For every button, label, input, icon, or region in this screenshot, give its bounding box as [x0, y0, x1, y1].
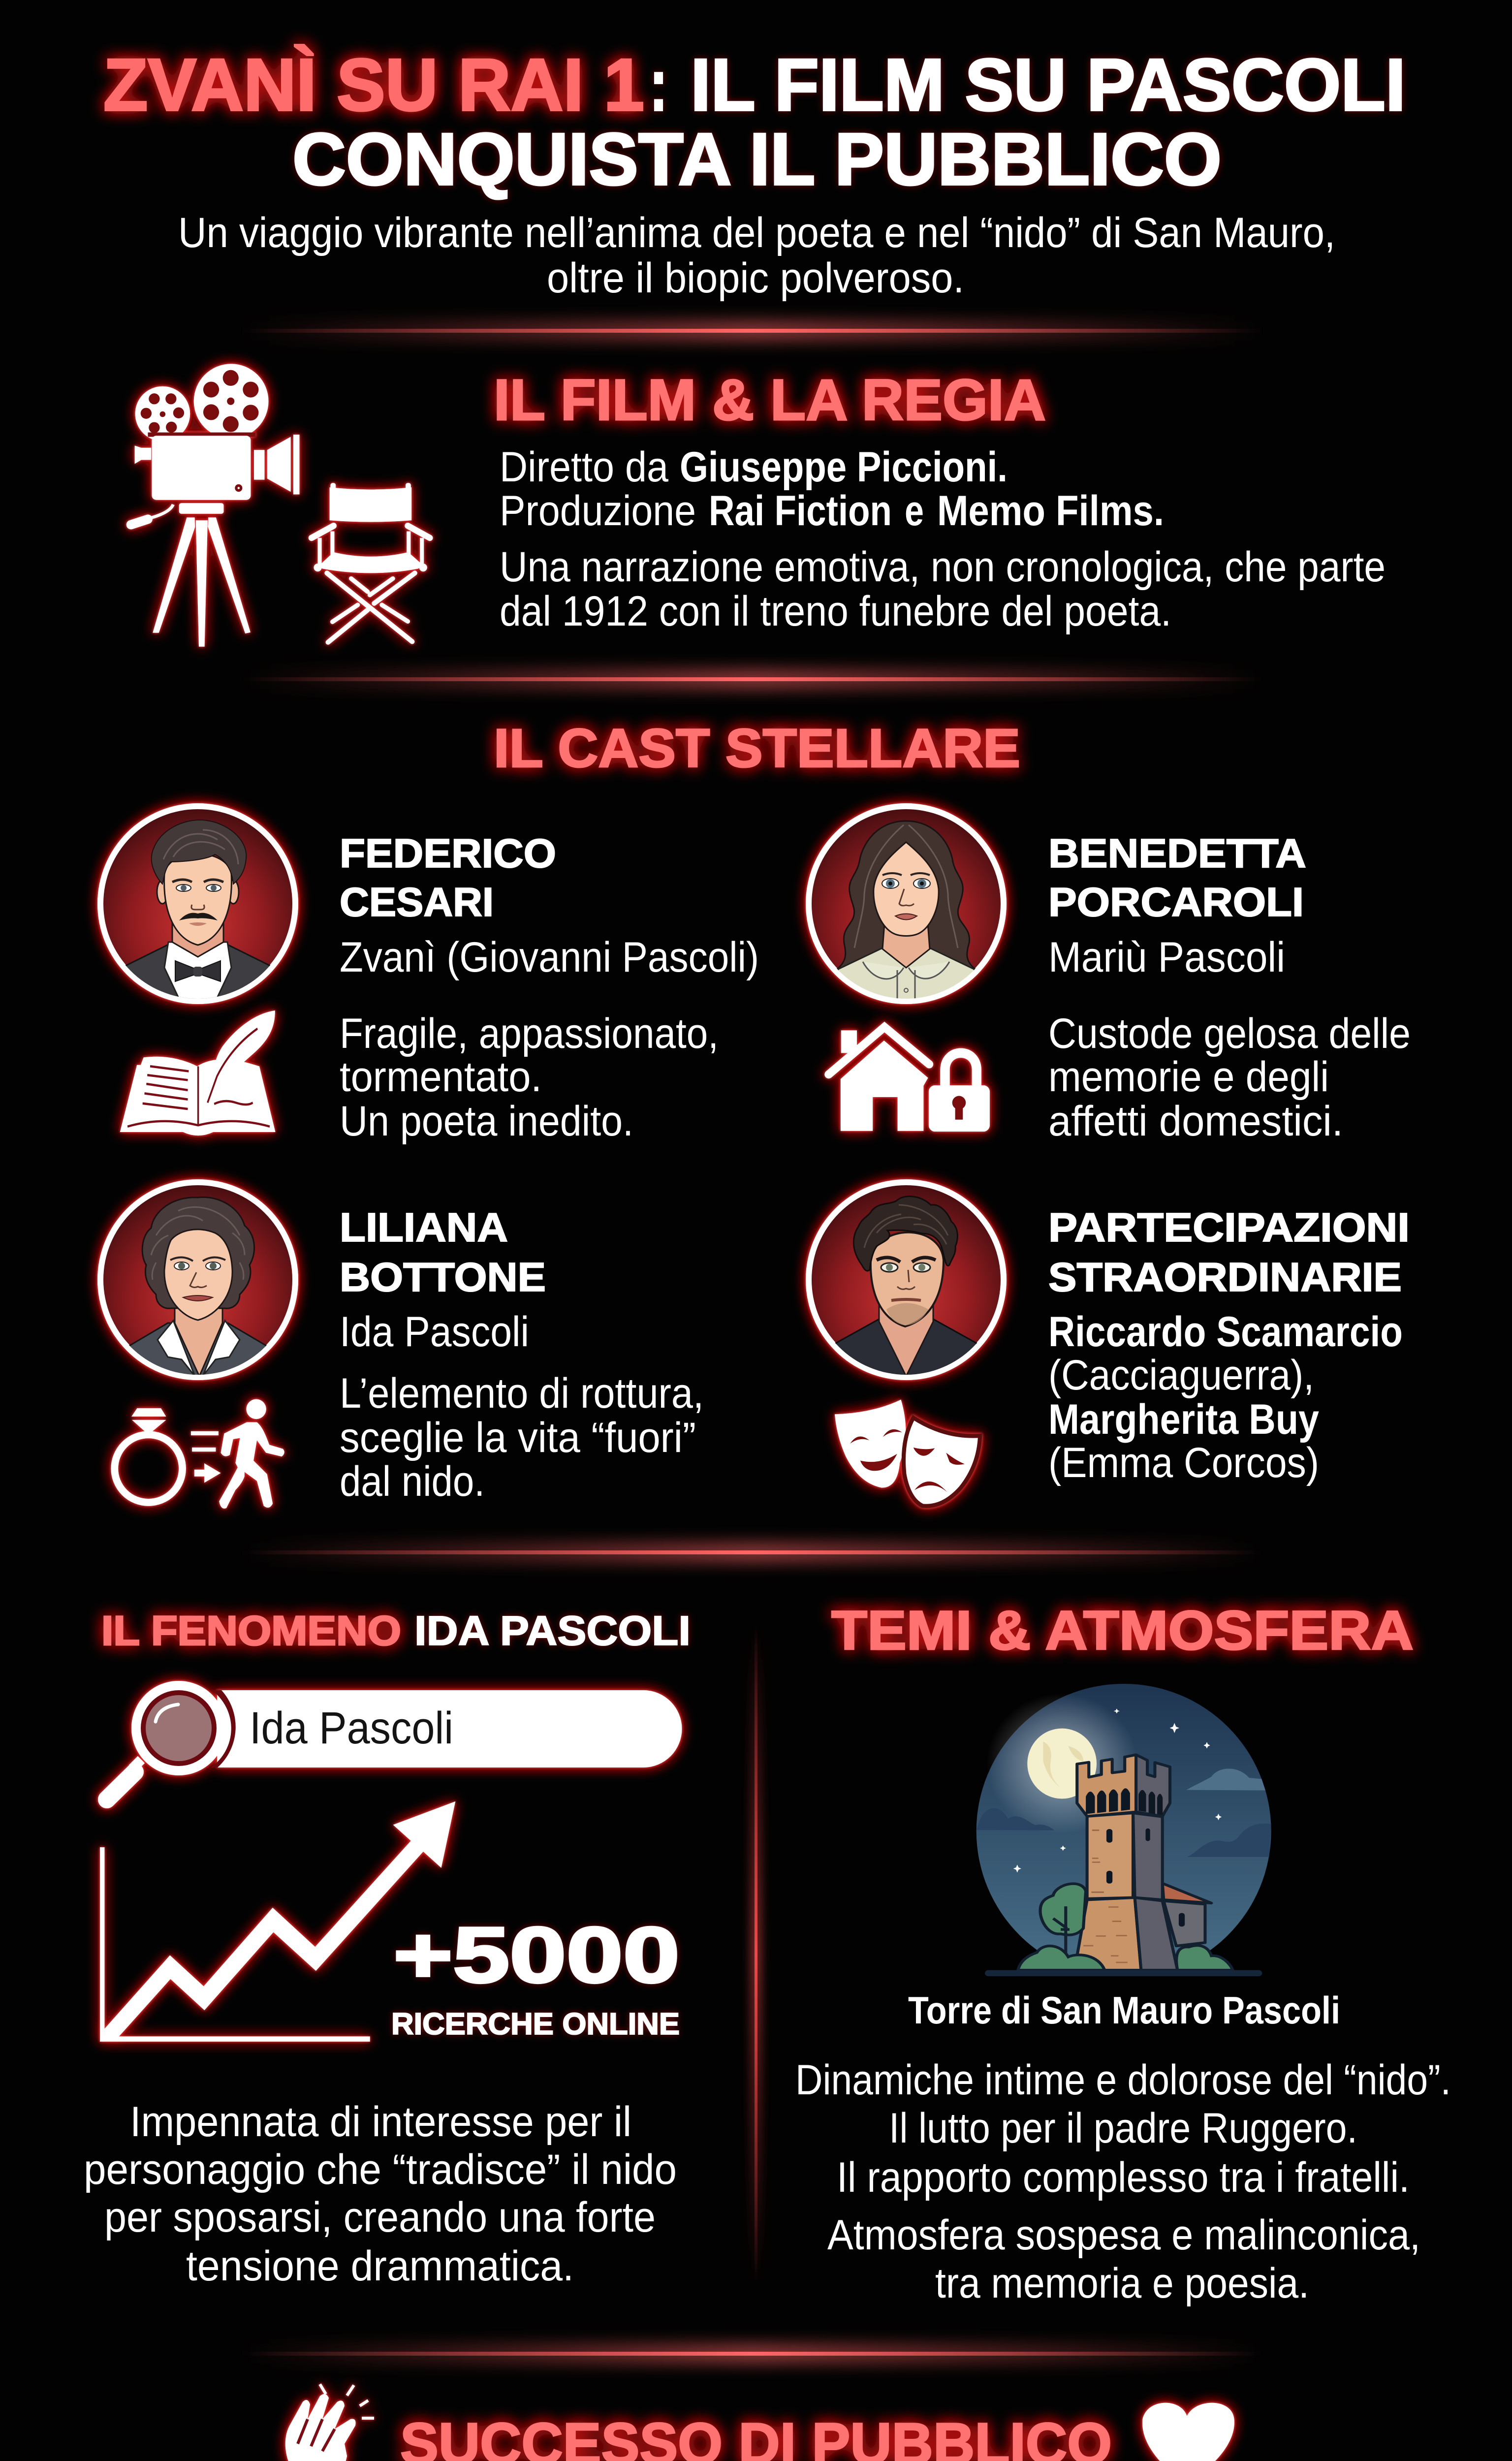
text: partecipazioni straordinarie: STRAORDINARIE — [1048, 1254, 1402, 1300]
text: Benedetta Porcaroli: memorie e degli — [1048, 1053, 1329, 1101]
heading: il fenomeno ida pascoli: IL FENOMENO — [101, 1608, 401, 1654]
text: Liliana Bottone: dal nido. — [340, 1458, 485, 1505]
text: fenomeno description: tensione drammatica. — [186, 2242, 574, 2290]
text: partecipazioni straordinarie: PARTECIPAZIONI — [1048, 1204, 1410, 1250]
text: fenomeno description: per sposarsi, creando una forte — [104, 2194, 656, 2241]
search bar with magnifier: Ida Pascoli — [250, 1703, 453, 1753]
illustration: torre di San Mauro — [976, 1684, 1271, 1978]
text: temi description: tra memoria e poesia. — [935, 2260, 1309, 2307]
text: Liliana Bottone: sceglie la vita “fuori” — [340, 1414, 696, 1461]
text: film details: dal 1912 con il treno funebre del poeta. — [500, 588, 1171, 635]
icon: clapping hands — [285, 2384, 374, 2461]
text: Benedetta Porcaroli — [1048, 830, 1411, 1145]
text: Liliana Bottone: LILIANA — [340, 1204, 508, 1250]
text: fenomeno description — [84, 2098, 677, 2290]
text: Liliana Bottone: L’elemento di rottura, — [340, 1370, 704, 1417]
title: ZVANÌ SU RAI 1 — [103, 43, 644, 126]
heading: il fenomeno ida pascoli: IDA PASCOLI — [414, 1608, 691, 1654]
text: Federico Cesari: Un poeta inedito. — [340, 1098, 633, 1145]
icon: ring and walking figure — [115, 1399, 284, 1509]
text: partecipazioni straordinarie — [1048, 1204, 1410, 1486]
portrait: Riccardo Scamarcio — [806, 1179, 1007, 1386]
text: Liliana Bottone: BOTTONE — [340, 1254, 546, 1300]
subtitle: oltre il biopic polveroso. — [547, 254, 964, 302]
text: fenomeno description: personaggio che “tradisce” il nido — [84, 2146, 677, 2193]
icon: theatre masks — [835, 1400, 980, 1506]
text: partecipazioni straordinarie: (Cacciaguerra), — [1048, 1352, 1314, 1399]
portrait: Liliana Bottone — [97, 1179, 298, 1386]
heading: il cast stellare: IL CAST STELLARE — [494, 718, 1020, 779]
text: Federico Cesari: Fragile, appassionato, — [340, 1010, 719, 1057]
title: CONQUISTA IL PUBBLICO — [292, 118, 1222, 200]
text: Benedetta Porcaroli: Custode gelosa delle — [1048, 1010, 1411, 1057]
text: film details: Una narrazione emotiva, non cronologica, che parte — [500, 543, 1386, 591]
text: film details: Giuseppe Piccioni. — [680, 443, 1008, 491]
caption: torre di San Mauro Pascoli: Torre di San Mauro Pascoli — [908, 1988, 1340, 2032]
icon: director chair — [312, 483, 430, 642]
text: Benedetta Porcaroli: PORCAROLI — [1048, 879, 1304, 925]
text: partecipazioni straordinarie: (Emma Corcos) — [1048, 1439, 1319, 1486]
text: temi description: Il rapporto complesso tra i fratelli. — [837, 2154, 1410, 2201]
text: film details: Memo Films. — [937, 487, 1164, 535]
text: fenomeno description: Impennata di interesse per il — [130, 2098, 631, 2145]
text: partecipazioni straordinarie: Margherita Buy — [1048, 1396, 1319, 1443]
heading: il fenomeno ida pascoli — [101, 1608, 691, 1654]
text: partecipazioni straordinarie: Riccardo Scamarcio — [1048, 1308, 1403, 1356]
text: Benedetta Porcaroli: affetti domestici. — [1048, 1098, 1343, 1145]
heading: il film e la regia: IL FILM & LA REGIA — [494, 368, 1046, 433]
portrait: Federico Cesari — [97, 803, 298, 1010]
text: temi description: Atmosfera sospesa e malinconica, — [827, 2211, 1420, 2259]
stat: +5000 ricerche online: RICERCHE ONLINE — [391, 2007, 680, 2041]
text: Federico Cesari: CESARI — [340, 879, 494, 925]
text: Federico Cesari — [340, 830, 759, 1145]
text: temi description — [795, 2056, 1451, 2307]
heading: temi e atmosfera: TEMI & ATMOSFERA — [831, 1600, 1414, 1661]
stat: +5000 ricerche online — [391, 1911, 680, 2041]
text: Benedetta Porcaroli: BENEDETTA — [1048, 830, 1306, 876]
text: Federico Cesari: Zvanì (Giovanni Pascoli) — [340, 934, 759, 981]
text: Federico Cesari: tormentato. — [340, 1053, 542, 1101]
title: : — [650, 43, 667, 126]
text: film details: Rai Fiction — [709, 487, 892, 535]
text: film details — [500, 443, 1386, 635]
text: Liliana Bottone: Ida Pascoli — [340, 1308, 529, 1356]
text: Liliana Bottone — [340, 1204, 704, 1505]
text: temi description: Il lutto per il padre Ruggero. — [889, 2105, 1357, 2152]
text: film details: Diretto da — [500, 443, 668, 491]
icon: book and quill — [120, 1010, 275, 1136]
line chart with rising arrow — [100, 1801, 455, 2042]
text: temi description: Dinamiche intime e dolorose del “nido”. — [795, 2056, 1451, 2104]
subtitle — [178, 209, 1335, 302]
portrait: Benedetta Porcaroli — [806, 803, 1007, 1010]
title — [103, 43, 1406, 200]
text: Federico Cesari: FEDERICO — [340, 830, 556, 876]
icon: heart — [1142, 2403, 1234, 2461]
stat: +5000 ricerche online: +5000 — [393, 1911, 680, 1999]
text: Benedetta Porcaroli: Mariù Pascoli — [1048, 934, 1285, 981]
subtitle: Un viaggio vibrante nell’anima del poeta e nel “nido” di San Mauro, — [178, 209, 1335, 256]
icon: house and padlock — [829, 1027, 990, 1132]
text: film details: e — [905, 487, 924, 535]
title: IL FILM SU PASCOLI — [691, 43, 1406, 126]
search bar with magnifier — [107, 1681, 682, 1799]
text: film details: Produzione — [500, 487, 696, 535]
icon: film camera on tripod — [131, 364, 299, 647]
